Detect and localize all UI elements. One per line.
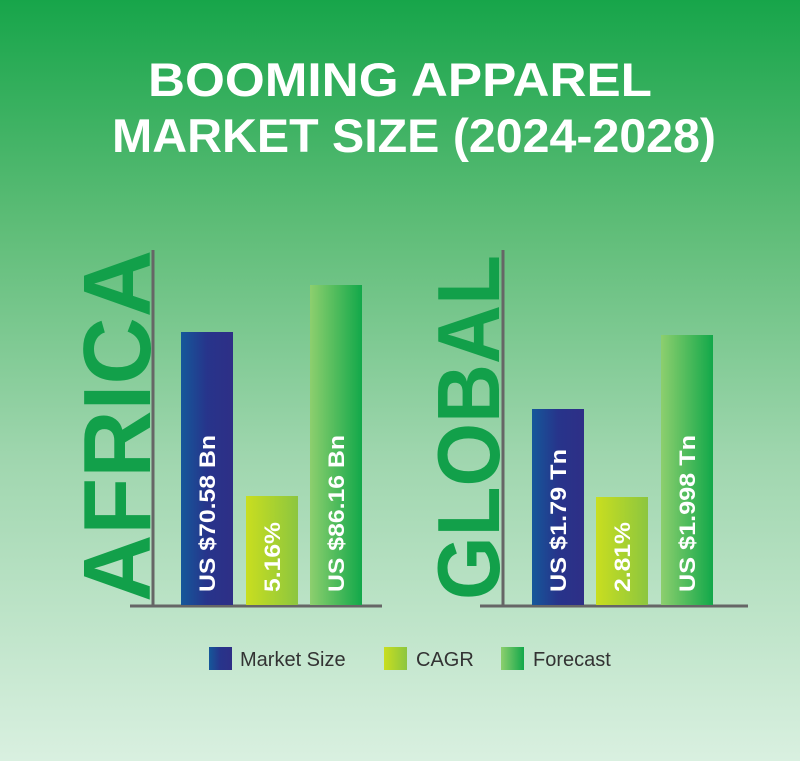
bar: global cagr: 2.81% <box>610 522 635 592</box>
bar: global forecast <box>661 335 713 605</box>
africa label: AFRICA <box>64 250 171 602</box>
bar: africa forecast: US $86.16 Bn <box>324 435 349 592</box>
title <box>112 53 716 162</box>
bar: africa cagr: 5.16% <box>260 522 285 592</box>
title: MARKET SIZE (2024-2028) <box>112 109 716 162</box>
bar: global market size: US $1.79 Tn <box>546 449 571 592</box>
bar: global forecast: US $1.998 Tn <box>675 435 700 592</box>
panel: africa chart <box>64 250 382 607</box>
panel: global chart <box>419 250 748 607</box>
bar: global cagr <box>596 497 648 605</box>
legend: Market Size <box>240 649 346 671</box>
bar: africa forecast <box>310 285 362 605</box>
legend: CAGR <box>416 649 474 671</box>
legend <box>209 647 611 671</box>
bar: africa cagr <box>246 496 298 605</box>
bar: africa market size <box>181 332 233 605</box>
global label: GLOBAL <box>419 255 518 600</box>
title: BOOMING APPAREL <box>148 53 652 106</box>
bar: africa market size: US $70.58 Bn <box>195 435 220 592</box>
bar: global market size <box>532 409 584 605</box>
legend: Forecast <box>533 649 611 671</box>
